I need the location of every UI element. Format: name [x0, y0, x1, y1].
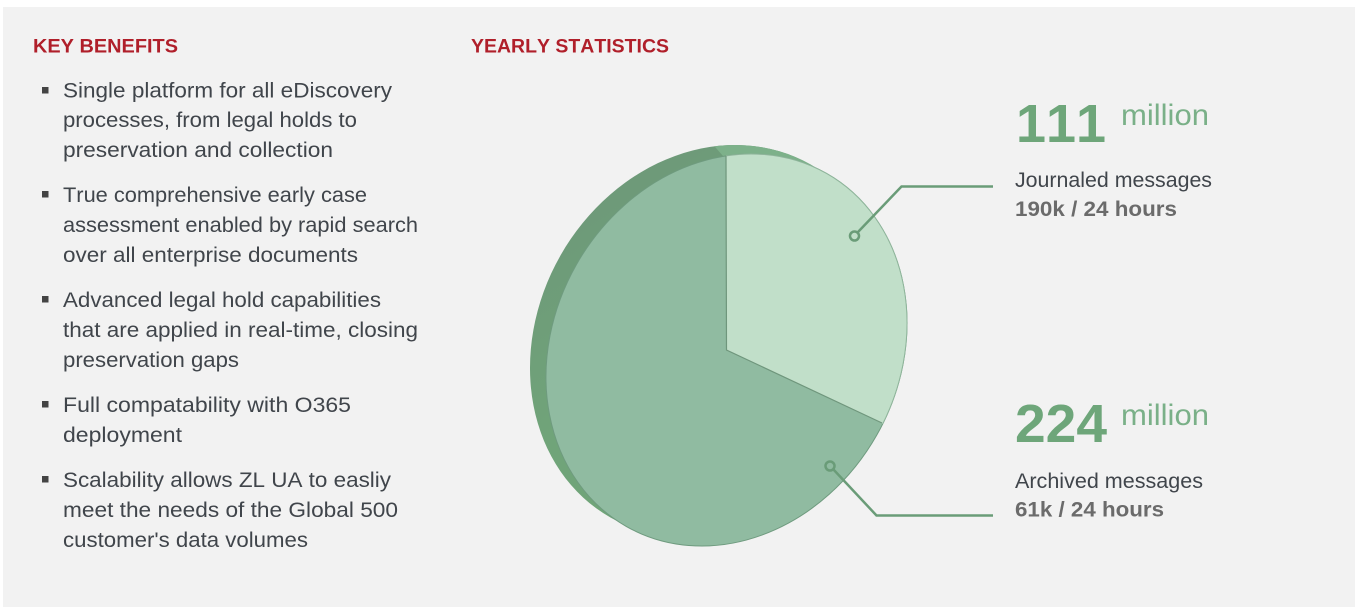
benefit 3: Advanced legal hold capabilities [63, 288, 381, 312]
benefit 1: preservation and collection [63, 138, 333, 162]
benefit 2: assessment enabled by rapid search [63, 213, 418, 237]
benefit 2: True comprehensive early case [63, 183, 367, 207]
benefit 5: customer's data volumes [63, 528, 308, 552]
benefit 4: Full compatability with O365 [63, 393, 351, 417]
stat: journaled messages: 111 [1016, 94, 1106, 154]
benefit 3: that are applied in real-time, closing [63, 318, 418, 342]
stat: journaled messages: million [1121, 99, 1209, 132]
benefit 5: Scalability allows ZL UA to easliy [63, 468, 391, 492]
stat: archived messages: 224 [1015, 394, 1107, 454]
connector: archived [826, 462, 993, 516]
slice: journaled messages [726, 154, 908, 424]
benefit 2 [42, 183, 418, 267]
stat: archived messages: 61k / 24 hours [1015, 498, 1164, 522]
pie side [530, 145, 816, 521]
benefit 3 [42, 288, 418, 372]
stat: journaled messages: Journaled messages [1015, 168, 1212, 192]
benefit 4 [42, 393, 351, 447]
benefits list [42, 78, 418, 552]
stat: archived messages: million [1121, 399, 1209, 432]
benefit 2: over all enterprise documents [63, 243, 358, 267]
benefit 5 [42, 468, 398, 552]
stat: journaled messages [1015, 94, 1212, 221]
connector: journaled [850, 186, 993, 240]
benefit 3: preservation gaps [63, 348, 239, 372]
slice: archived messages [476, 88, 977, 610]
heading: yearly statistics: YEARLY STATISTICS [471, 36, 669, 58]
benefit 5: meet the needs of the Global 500 [63, 498, 398, 522]
benefit 1 [42, 78, 392, 162]
stat: archived messages: Archived messages [1015, 469, 1203, 493]
stat: archived messages [1015, 394, 1209, 522]
slice edges [726, 156, 882, 423]
stat: journaled messages: 190k / 24 hours [1015, 197, 1177, 221]
benefit 1: processes, from legal holds to [63, 108, 357, 132]
benefit 1: Single platform for all eDiscovery [63, 78, 392, 102]
heading: key benefits: KEY BENEFITS [33, 36, 178, 58]
benefit 4: deployment [63, 423, 182, 447]
3D pie chart [530, 145, 908, 546]
